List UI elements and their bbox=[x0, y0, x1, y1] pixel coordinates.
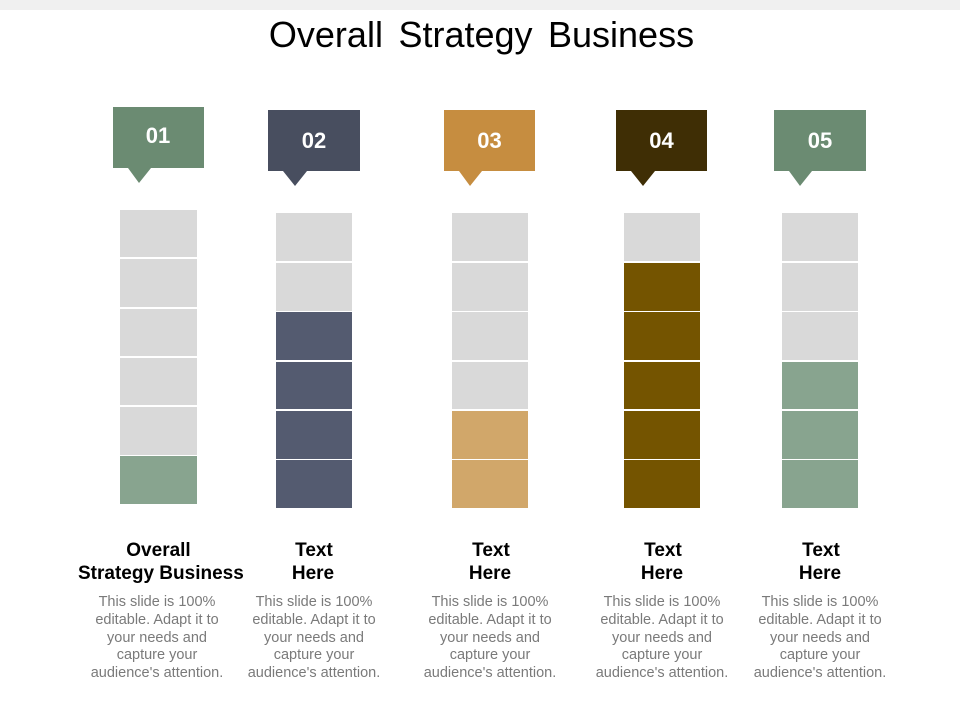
callout: 01 bbox=[113, 107, 204, 183]
top grey strip bbox=[0, 0, 960, 10]
body text: your needs and bbox=[264, 630, 364, 646]
panel: column 05 bbox=[754, 110, 886, 681]
body text: audience's attention. bbox=[424, 665, 556, 681]
heading: Strategy Business bbox=[78, 563, 244, 584]
progress bar: 1 of 6 bbox=[120, 210, 197, 504]
body text: This slide is 100% bbox=[604, 594, 720, 610]
heading bbox=[641, 540, 683, 584]
body text bbox=[424, 594, 556, 681]
body text: capture your bbox=[780, 647, 860, 663]
body text: editable. Adapt it to bbox=[252, 612, 376, 628]
callout: 05: 05 bbox=[808, 128, 832, 153]
callout: 02: 02 bbox=[302, 128, 326, 153]
heading: Text bbox=[295, 540, 333, 561]
progress bar: 2 of 6 bbox=[452, 213, 528, 508]
progress bar: 5 of 6 bbox=[624, 213, 700, 508]
title: Overall Strategy Business bbox=[269, 14, 694, 55]
panel: column 02 bbox=[248, 110, 380, 681]
body text bbox=[248, 594, 380, 681]
body text: capture your bbox=[117, 647, 197, 663]
panel: column 04 bbox=[596, 110, 728, 681]
callout: 04 bbox=[616, 110, 707, 186]
body text: your needs and bbox=[440, 630, 540, 646]
heading bbox=[799, 540, 841, 584]
progress bar: 4 of 6 bbox=[276, 213, 352, 508]
body text: editable. Adapt it to bbox=[600, 612, 724, 628]
callout: 01: 01 bbox=[146, 123, 170, 148]
body text: This slide is 100% bbox=[99, 594, 215, 610]
body text: capture your bbox=[274, 647, 354, 663]
callout: 05 bbox=[774, 110, 866, 186]
body text: capture your bbox=[450, 647, 530, 663]
heading bbox=[292, 540, 334, 584]
heading: Here bbox=[641, 563, 683, 584]
heading bbox=[78, 540, 244, 584]
body text: audience's attention. bbox=[754, 665, 886, 681]
body text: audience's attention. bbox=[91, 665, 223, 681]
panel: column 01 bbox=[78, 107, 244, 681]
callout: 03 bbox=[444, 110, 535, 186]
body text bbox=[754, 594, 886, 681]
heading: Overall bbox=[126, 540, 191, 561]
heading bbox=[469, 540, 511, 584]
body text: your needs and bbox=[770, 630, 870, 646]
body text: your needs and bbox=[612, 630, 712, 646]
progress bar: 3 of 6 bbox=[782, 213, 858, 508]
heading: Text bbox=[644, 540, 682, 561]
body text bbox=[596, 594, 728, 681]
callout: 04: 04 bbox=[649, 128, 674, 153]
body text: This slide is 100% bbox=[256, 594, 372, 610]
body text: editable. Adapt it to bbox=[758, 612, 882, 628]
body text: your needs and bbox=[107, 630, 207, 646]
body text: editable. Adapt it to bbox=[95, 612, 219, 628]
body text: editable. Adapt it to bbox=[428, 612, 552, 628]
body text bbox=[91, 594, 223, 681]
body text: This slide is 100% bbox=[432, 594, 548, 610]
body text: audience's attention. bbox=[248, 665, 380, 681]
body text: This slide is 100% bbox=[762, 594, 878, 610]
heading: Here bbox=[469, 563, 511, 584]
panel: column 03 bbox=[424, 110, 556, 681]
callout: 03: 03 bbox=[477, 128, 502, 153]
heading: Here bbox=[292, 563, 334, 584]
heading: Text bbox=[802, 540, 840, 561]
heading: Here bbox=[799, 563, 841, 584]
body text: audience's attention. bbox=[596, 665, 728, 681]
heading: Text bbox=[472, 540, 510, 561]
body text: capture your bbox=[622, 647, 702, 663]
callout: 02 bbox=[268, 110, 360, 186]
